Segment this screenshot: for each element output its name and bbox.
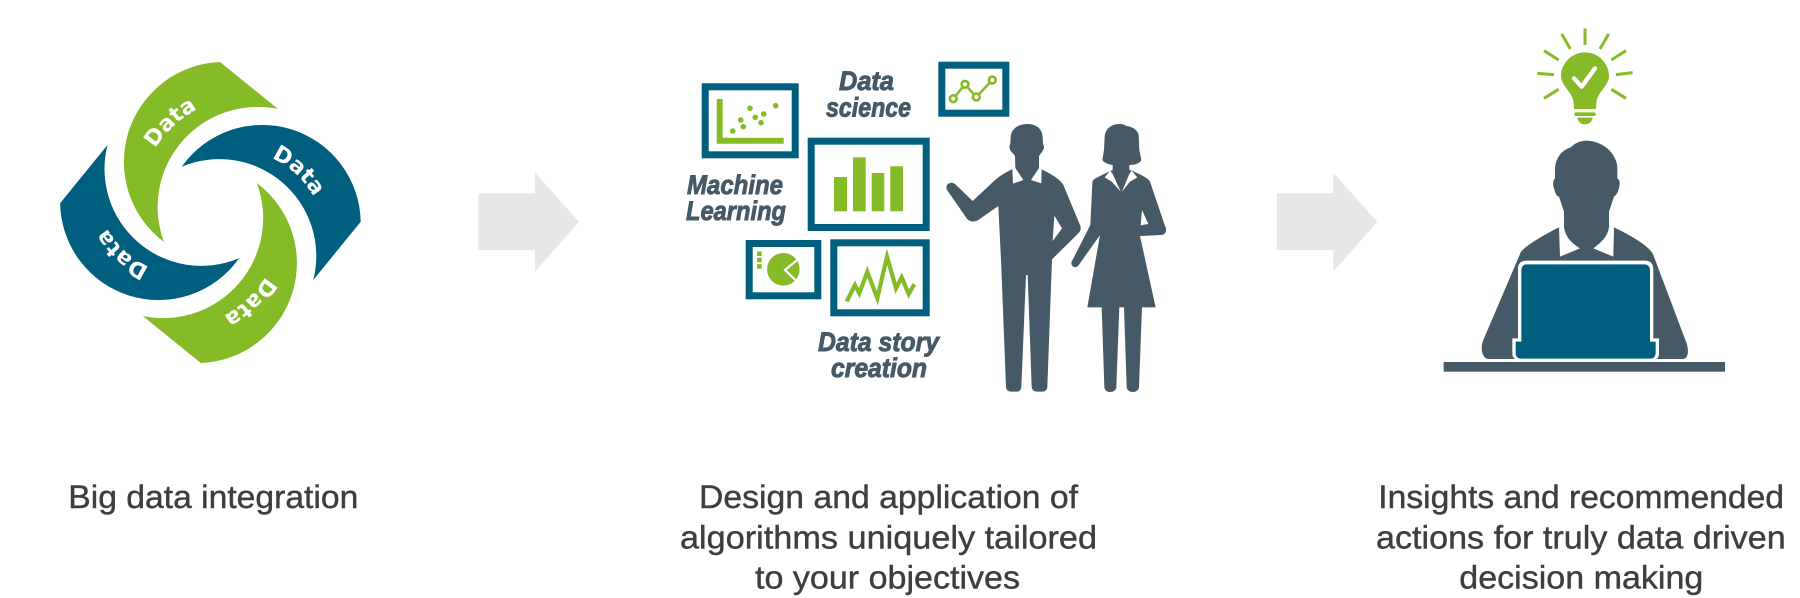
heading: machine learning bbox=[686, 170, 786, 226]
icon: woman silhouette bbox=[1071, 124, 1166, 392]
caption: algorithms: to your objectives bbox=[755, 560, 1020, 596]
icon: man silhouette bbox=[946, 124, 1081, 392]
icon: laptop bbox=[1512, 261, 1659, 360]
segment: teal left: Data bbox=[99, 230, 148, 280]
segment: teal right bbox=[182, 125, 361, 280]
panel: data science graphics bbox=[686, 65, 1166, 392]
caption: algorithms: algorithms uniquely tailored bbox=[680, 520, 1097, 556]
caption: algorithms: Design and application of bbox=[699, 479, 1078, 515]
segment: teal right: Data bbox=[273, 144, 322, 196]
icon: zigzag chart frame bbox=[834, 243, 926, 313]
heading: machine learning: Machine bbox=[687, 170, 783, 200]
arrow: first step bbox=[478, 173, 579, 272]
caption: big data integration: Big data integration bbox=[68, 479, 358, 515]
heading: data story creation: Data story bbox=[818, 327, 941, 357]
segment: green top bbox=[124, 62, 278, 242]
caption: insights: Insights and recommended bbox=[1378, 479, 1784, 515]
panel: insights person with laptop bbox=[1444, 28, 1725, 372]
icon: light bulb with check bbox=[1537, 28, 1633, 124]
icon: bar chart frame bbox=[811, 141, 926, 228]
panel: big data integration swirl bbox=[60, 62, 361, 363]
icon: person silhouette bbox=[1482, 141, 1688, 359]
heading: data story creation: creation bbox=[831, 353, 927, 383]
icon: pie chart frame bbox=[749, 244, 818, 296]
icon: line chart frame bbox=[942, 65, 1006, 113]
caption: insights bbox=[1376, 479, 1786, 596]
arrow: second step bbox=[1277, 173, 1377, 272]
desk bbox=[1444, 362, 1725, 372]
segment: teal left bbox=[60, 145, 239, 300]
segment: green bottom: Data bbox=[225, 278, 278, 324]
caption: algorithms bbox=[680, 479, 1097, 596]
heading: machine learning: Learning bbox=[686, 196, 786, 226]
caption: insights: decision making bbox=[1459, 560, 1703, 596]
icon: scatter plot frame bbox=[705, 87, 795, 155]
heading: data science bbox=[826, 66, 911, 123]
heading: data story creation bbox=[818, 327, 941, 383]
segment: green top: Data bbox=[143, 101, 196, 147]
heading: data science: Data bbox=[839, 66, 894, 96]
segment: green bottom bbox=[142, 183, 297, 363]
heading: data science: science bbox=[826, 93, 911, 123]
caption: insights: actions for truly data driven bbox=[1376, 520, 1786, 556]
